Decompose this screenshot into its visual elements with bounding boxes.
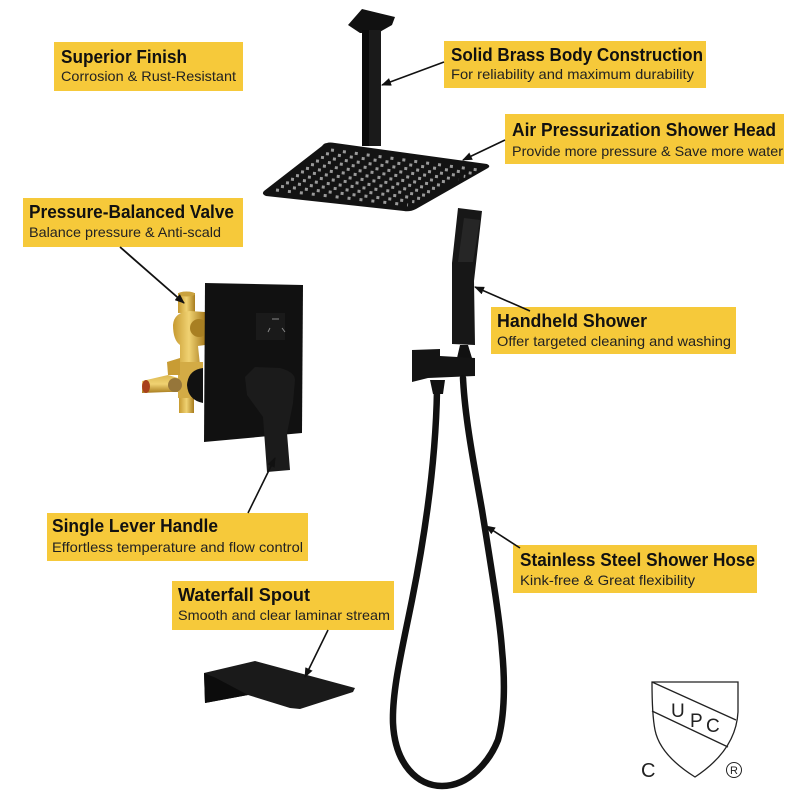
label: Solid Brass Body Construction: Solid Brass Body Construction [451,45,703,65]
cUPC certification mark: U [671,701,685,722]
valve brass body [142,292,208,413]
label: Stainless Steel Shower Hose [513,545,757,593]
cUPC certification mark: R [730,765,738,777]
label: Superior Finish: Corrosion & Rust-Resistant [61,68,236,84]
label: Handheld Shower: Handheld Shower [497,311,647,331]
label: Single Lever Handle: Effortless temperature and flow control [52,539,303,555]
label: Waterfall Spout: Waterfall Spout [178,585,310,605]
label: Air Pressurization Shower Head: Provide more pressure & Save more water [512,143,783,159]
cUPC certification mark: C [706,716,720,737]
cUPC certification mark: C [641,760,655,782]
shower hose [393,378,504,786]
ceiling shower arm [348,9,395,146]
rain shower head [263,142,489,211]
label: Stainless Steel Shower Hose: Kink-free & Great flexibility [520,572,695,588]
label: Handheld Shower: Offer targeted cleaning and washing [497,333,731,349]
arrow: brass body [382,62,444,85]
cUPC certification mark [641,682,742,782]
arrow: shower head [463,140,505,160]
label: Stainless Steel Shower Hose: Stainless Steel Shower Hose [520,550,755,570]
label: Waterfall Spout [172,581,394,630]
arrow: pressure valve [120,247,184,303]
label: Pressure-Balanced Valve [23,198,243,247]
arrow: handheld shower [475,287,530,311]
label: Pressure-Balanced Valve: Pressure-Balanced Valve [29,202,234,222]
label: Superior Finish: Superior Finish [61,47,187,67]
arrow: spout [305,630,328,677]
label: Air Pressurization Shower Head [505,114,784,164]
arrow: hose [486,526,520,548]
tub spout [204,661,355,709]
wall bracket [412,349,475,394]
label: Solid Brass Body Construction: For reliability and maximum durability [451,66,694,82]
handheld shower [452,208,482,358]
label: Air Pressurization Shower Head: Air Pressurization Shower Head [512,120,776,140]
cUPC certification mark: P [690,711,703,732]
label: Waterfall Spout: Smooth and clear laminar stream [178,607,390,623]
label: Pressure-Balanced Valve: Balance pressure & Anti-scald [29,224,221,240]
label: Solid Brass Body Construction [444,41,706,88]
label: Single Lever Handle: Single Lever Handle [52,516,218,536]
label: Handheld Shower [491,307,736,354]
label: Single Lever Handle [47,513,308,561]
valve plate with diverter and lever handle [204,283,303,472]
arrow: lever handle [248,458,275,513]
label: Superior Finish [54,42,243,91]
